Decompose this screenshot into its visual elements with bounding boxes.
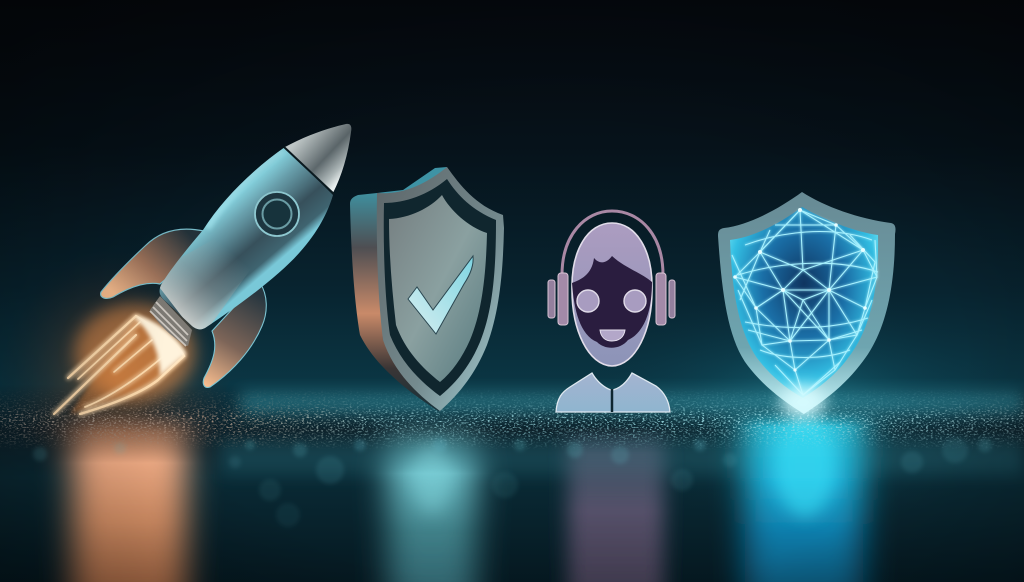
rocket flame fill	[70, 316, 184, 414]
agent left outer cup	[548, 280, 555, 318]
icon: check shield	[350, 167, 504, 412]
agent face	[572, 256, 652, 348]
agent collar line	[611, 389, 613, 412]
agent headband	[562, 211, 663, 275]
agent shoulders	[556, 373, 670, 412]
shield panel	[730, 207, 878, 398]
background glow: network shield	[586, 285, 1024, 525]
reflection: check shield	[388, 415, 476, 582]
reflection: shield bright spot	[775, 413, 835, 517]
bokeh haze band	[220, 440, 1024, 474]
shield side wall	[350, 193, 440, 412]
agent left ear cup	[558, 273, 568, 325]
shield outer rim	[377, 167, 504, 411]
agent mouth	[600, 330, 625, 341]
bokeh dots	[33, 437, 992, 527]
shield dark ring	[384, 179, 496, 396]
agent right eye	[624, 290, 646, 312]
mesh network	[732, 210, 878, 395]
rocket edge highlight	[207, 150, 283, 228]
rocket nose seam	[284, 147, 334, 194]
rocket nozzle	[150, 296, 192, 346]
rocket flame	[54, 316, 184, 414]
rocket lower body highlight	[160, 248, 246, 330]
rocket body	[160, 147, 333, 329]
background glow: rocket	[0, 250, 230, 500]
shield top edge	[377, 167, 447, 200]
icon: network shield	[718, 192, 896, 418]
shield rim	[718, 192, 896, 414]
agent left eye	[577, 290, 599, 312]
icon: rocket	[54, 124, 351, 414]
reflection: support agent	[568, 425, 664, 582]
agent head	[572, 223, 652, 366]
floor haze	[240, 392, 1024, 414]
agent right outer cup	[669, 280, 675, 318]
rocket right fin	[203, 283, 266, 387]
shield base glow	[781, 386, 825, 418]
rocket flame core	[134, 316, 186, 376]
rocket left fin	[101, 229, 204, 298]
glitter floor band	[0, 388, 1024, 450]
illustration scene	[0, 118, 1024, 582]
rocket nose cone	[285, 124, 351, 193]
mesh nodes	[733, 208, 867, 372]
rocket exhaust glow	[75, 304, 195, 400]
agent right ear cup	[656, 273, 666, 325]
icon: check mark	[408, 256, 473, 334]
reflection: rocket	[72, 412, 186, 582]
floor reflections	[72, 410, 863, 582]
shield inner panel	[389, 195, 487, 382]
reflection: network shield	[745, 410, 863, 582]
rocket porthole	[255, 192, 299, 236]
icon: support agent	[548, 211, 675, 412]
reflection: teal bright spot	[414, 443, 450, 513]
